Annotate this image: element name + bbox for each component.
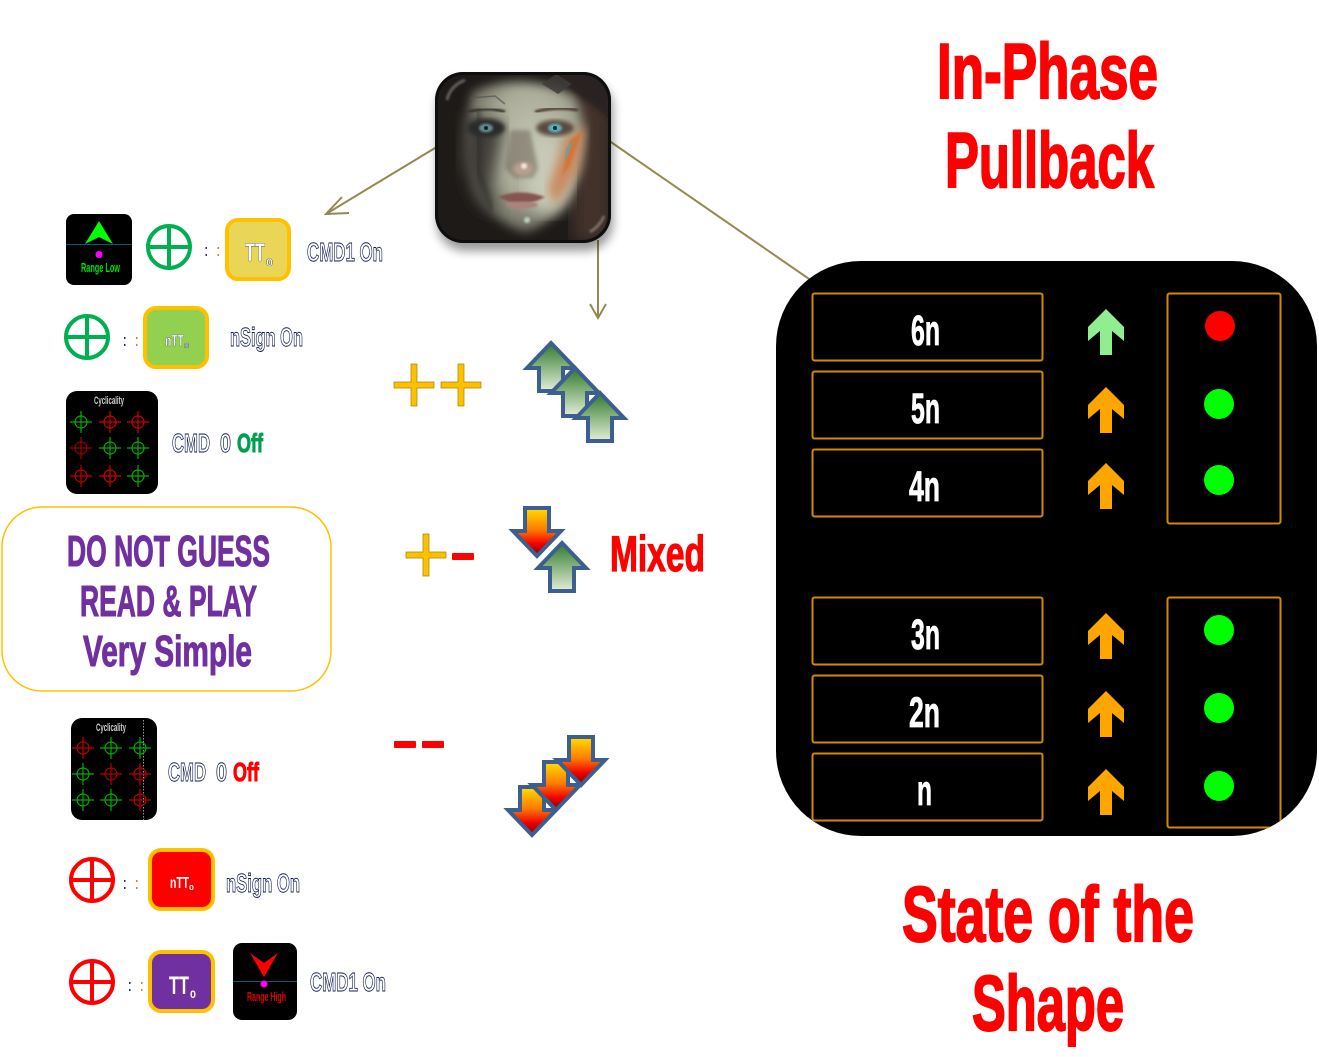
legend row: red nSign	[71, 850, 300, 909]
icon: Cyclicality grid	[71, 718, 157, 820]
icon: mixed arrows	[513, 508, 586, 591]
icon: red target	[71, 961, 113, 1003]
badge: yellow TT: 0	[266, 257, 273, 269]
status lights	[1204, 311, 1235, 801]
label: CMD 0 Off: CMD	[172, 428, 210, 458]
label: Mixed: Mixed	[610, 526, 705, 582]
label: nSign On: nSign On	[226, 868, 300, 898]
legend row: green nSign	[66, 308, 303, 367]
arrow: portrait down to arrow stack	[590, 240, 606, 318]
icon: three falling arrows	[508, 737, 605, 835]
label: nSign On: nSign On	[230, 322, 303, 352]
icon: Range High	[233, 943, 297, 1020]
icon: Cyclicality grid: Cyclicality	[96, 722, 126, 734]
row labels	[909, 307, 940, 815]
caption: State of the Shape	[902, 870, 1194, 1047]
icon: green target	[66, 316, 108, 358]
badge: purple TT	[150, 952, 213, 1011]
badge: red nTT: nTT	[170, 875, 189, 892]
symbol: plus minus	[406, 534, 474, 576]
up arrows	[1088, 309, 1124, 815]
callout: do not guess: DO NOT GUESS	[67, 527, 270, 576]
callout: do not guess	[2, 507, 331, 691]
icon: Cyclicality grid: Cyclicality	[94, 395, 124, 407]
row labels: 4n	[909, 463, 940, 511]
icon: Range High: Range High	[247, 989, 286, 1004]
icon: red target	[71, 859, 113, 901]
legend row: Cyclicality red off	[71, 718, 259, 820]
label: CMD 0 Off: Off	[233, 757, 259, 787]
badge: purple TT: 0	[190, 989, 196, 1001]
colon separator	[206, 247, 219, 256]
badge: red nTT	[150, 850, 213, 909]
legend row: Cyclicality green off	[66, 391, 263, 494]
arrow: portrait to state panel	[608, 140, 812, 281]
colon separator	[124, 880, 138, 889]
label: CMD1 On: CMD1 On	[310, 967, 386, 997]
portrait image	[435, 72, 613, 251]
badge: purple TT: TT	[169, 972, 189, 1000]
label: CMD 0 Off: CMD	[168, 757, 206, 787]
badge: green nTT: nTT	[165, 333, 184, 350]
icon: Range Low: Range Low	[81, 260, 120, 275]
colon separator	[124, 337, 138, 346]
icon: three rising arrows	[527, 343, 624, 441]
colon separator	[129, 982, 142, 991]
title: In-Phase Pullback	[937, 27, 1158, 204]
arrow: portrait to top-left legend	[326, 145, 440, 214]
label: CMD 0 Off	[172, 428, 263, 458]
symbol: minus minus	[394, 741, 444, 748]
badge: green nTT	[145, 308, 207, 367]
badge: green nTT: 0	[184, 343, 189, 350]
icon: Cyclicality grid	[66, 391, 158, 494]
badge: yellow TT: TT	[245, 239, 265, 267]
callout: do not guess: READ & PLAY	[80, 577, 257, 626]
legend row: Range High sell command	[71, 943, 386, 1020]
caption: State of the Shape: State of the	[902, 870, 1194, 958]
badge: yellow TT	[227, 220, 289, 279]
legend row: Range Low buy command	[66, 214, 383, 285]
icon: green target	[148, 226, 190, 268]
row labels: 5n	[911, 385, 940, 433]
label: CMD 0 Off: 0	[216, 757, 227, 787]
symbol: plus plus	[394, 364, 481, 406]
label: CMD 0 Off: Off	[237, 428, 263, 458]
panel: state of the shape	[776, 261, 1317, 836]
caption: State of the Shape: Shape	[972, 959, 1124, 1047]
row labels: 2n	[909, 689, 940, 737]
label: CMD 0 Off	[168, 757, 259, 787]
label: CMD 0 Off: 0	[220, 428, 231, 458]
badge: red nTT: 0	[189, 885, 194, 892]
row labels: n	[917, 767, 932, 815]
row labels: 6n	[911, 307, 940, 355]
callout: do not guess: Very Simple	[83, 627, 252, 676]
icon: Range Low	[66, 214, 132, 285]
title: In-Phase Pullback: Pullback	[945, 116, 1154, 204]
label: CMD1 On: CMD1 On	[307, 237, 383, 267]
title: In-Phase Pullback: In-Phase	[937, 27, 1158, 115]
row labels: 3n	[911, 611, 940, 659]
